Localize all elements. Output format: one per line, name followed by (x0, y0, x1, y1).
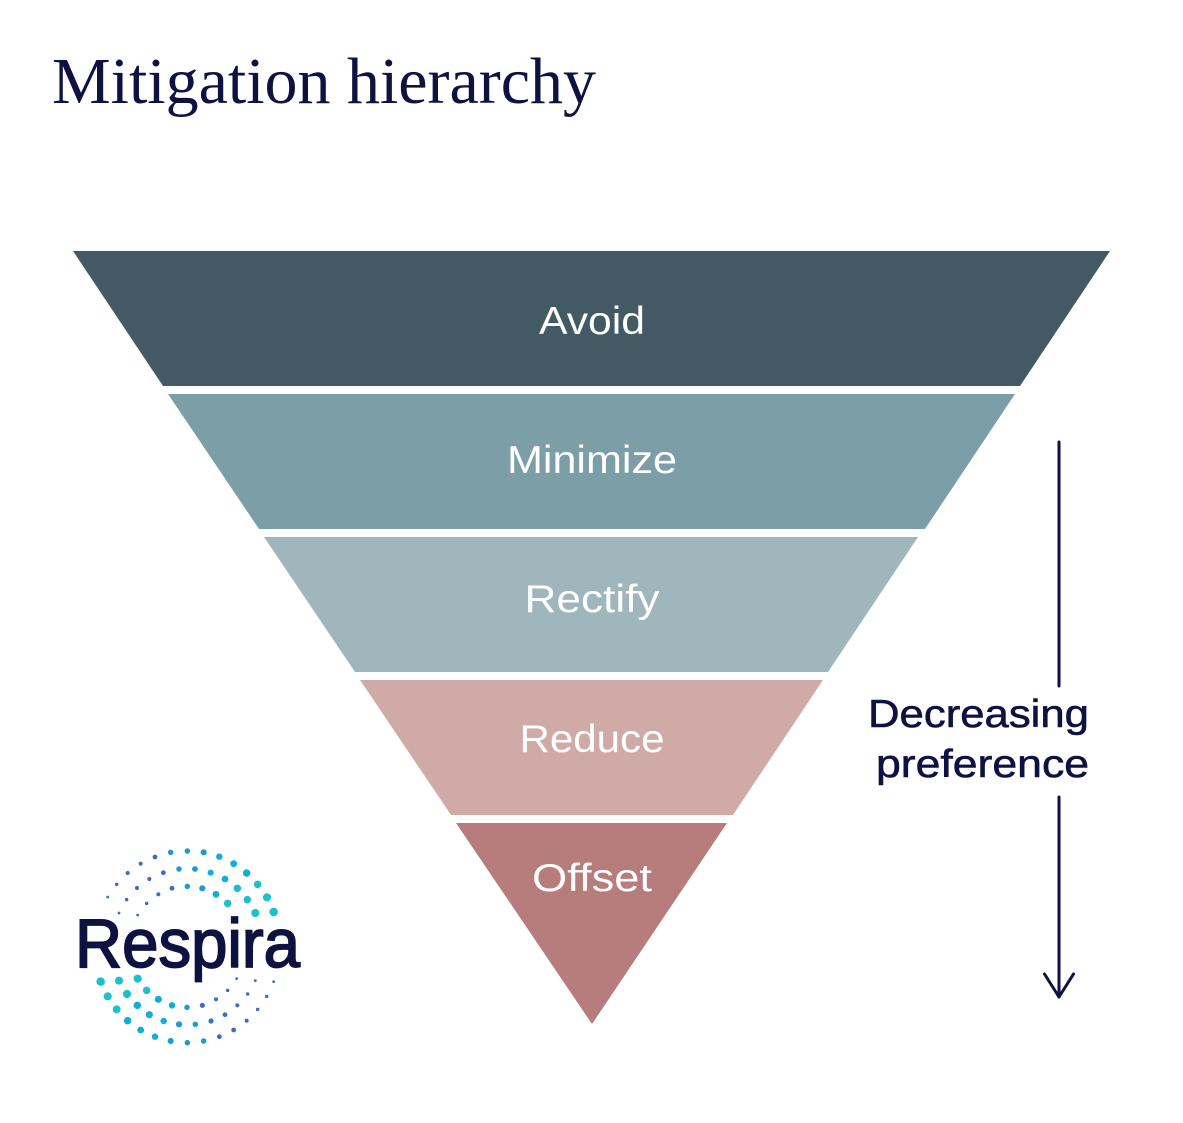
logo wordmark: Respira (75, 905, 301, 982)
label: decreasing preference: preference (876, 743, 1089, 786)
tier: Avoid: Avoid (539, 300, 645, 343)
tier: Reduce: Reduce (520, 718, 664, 761)
tier: Rectify: Rectify (524, 578, 660, 621)
tier: Minimize (168, 394, 1015, 529)
funnel diagram (73, 251, 1110, 1024)
tier: Avoid (73, 251, 1110, 386)
label: decreasing preference: Decreasing (868, 693, 1089, 736)
tier: Minimize: Minimize (507, 439, 677, 482)
tier: Offset: Offset (532, 857, 652, 900)
tier: Reduce (360, 680, 823, 815)
title: Mitigation hierarchy (52, 45, 596, 118)
label: decreasing preference (868, 693, 1089, 786)
tier: Offset (456, 823, 727, 1024)
logo dots (97, 849, 277, 1045)
tier: Rectify (264, 537, 918, 672)
arrow: decreasing preference (1044, 442, 1074, 997)
logo: Respira (75, 849, 301, 1045)
